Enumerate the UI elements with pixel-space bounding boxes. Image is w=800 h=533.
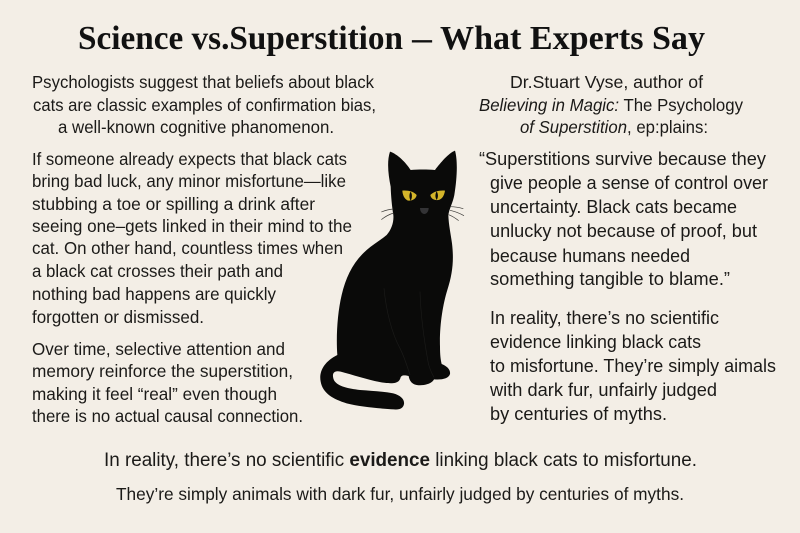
cat silhouette [320,151,457,409]
text block: confirmation bias intro: a well-known cognitive phanomenon. [58,117,334,137]
quote: because humans needed [490,245,690,266]
text block: Dr. Stuart Vyse attribution: Believing in Magic: The Psychology [479,95,743,115]
quote: unlucky not because of proof, but [490,220,757,241]
text block: how misfortune gets linked: bring bad luck, any minor misfortune—like [32,171,346,191]
text block: selective attention: there is no actual causal connection. [32,406,303,426]
quote: uncertainty. Black cats became [490,196,737,217]
text block: selective attention: memory reinforce the superstition, [32,361,293,381]
text block: Dr. Stuart Vyse attribution [479,72,743,137]
text block: how misfortune gets linked: forgotten or dismissed. [32,307,204,327]
title: What Experts Say [440,20,705,57]
text block: reality statement: with dark fur, unfairly judged [489,379,717,400]
quote [479,148,768,289]
text block: selective attention: making it feel “real” even though [32,384,277,404]
text block: reality statement: by centuries of myths. [490,403,667,424]
nose [420,208,429,214]
text block: how misfortune gets linked: seeing one–gets linked in their mind to the [32,216,352,236]
text block: how misfortune gets linked: a black cat crosses their path and [32,261,283,281]
text block: confirmation bias intro: cats are classic examples of confirmation bias, [33,95,376,115]
text block: reality statement: to misfortune. They’re simply aimals [490,355,776,376]
eyes [402,191,417,201]
text block: selective attention: Over time, selective attention and [32,339,285,359]
quote: something tangible to blame.” [490,268,730,289]
text block: how misfortune gets linked: cat. On other hand, countless times when [32,238,343,258]
icon: black cat [320,151,464,409]
whiskers [381,207,464,221]
text block: reality statement: evidence linking black cats [490,331,701,352]
footer statement: unfairly judged: They’re simply animals with dark fur, unfairly judged by centuries of myths. [116,484,684,504]
leg lines [384,288,434,377]
text block: how misfortune gets linked: nothing bad happens are quickly [32,284,276,304]
text block: Dr. Stuart Vyse attribution: of Superstition, ep:plains: [520,117,708,137]
quote: give people a sense of control over [490,172,768,193]
title: Science vs.Superstition [78,20,403,57]
quote: “Superstitions survive because they [479,148,767,169]
text block: Dr. Stuart Vyse attribution: Dr.Stuart Vyse, author of [510,72,703,92]
text block: selective attention [32,339,303,426]
title: — [411,20,433,57]
text block: confirmation bias intro: Psychologists suggest that beliefs about black [32,72,374,92]
title [78,20,705,57]
text block: reality statement: In reality, there’s no scientific [490,307,719,328]
footer statement: no scientific evidence: In reality, there’s no scientific evidence linking black cats to misfortune. [104,450,697,471]
text block: reality statement [489,307,776,424]
text block: confirmation bias intro [32,72,376,137]
text block: how misfortune gets linked: If someone already expects that black cats [32,149,347,169]
text block: how misfortune gets linked: stubbing a toe or spilling a drink after [32,194,315,214]
text block: how misfortune gets linked [32,149,352,327]
